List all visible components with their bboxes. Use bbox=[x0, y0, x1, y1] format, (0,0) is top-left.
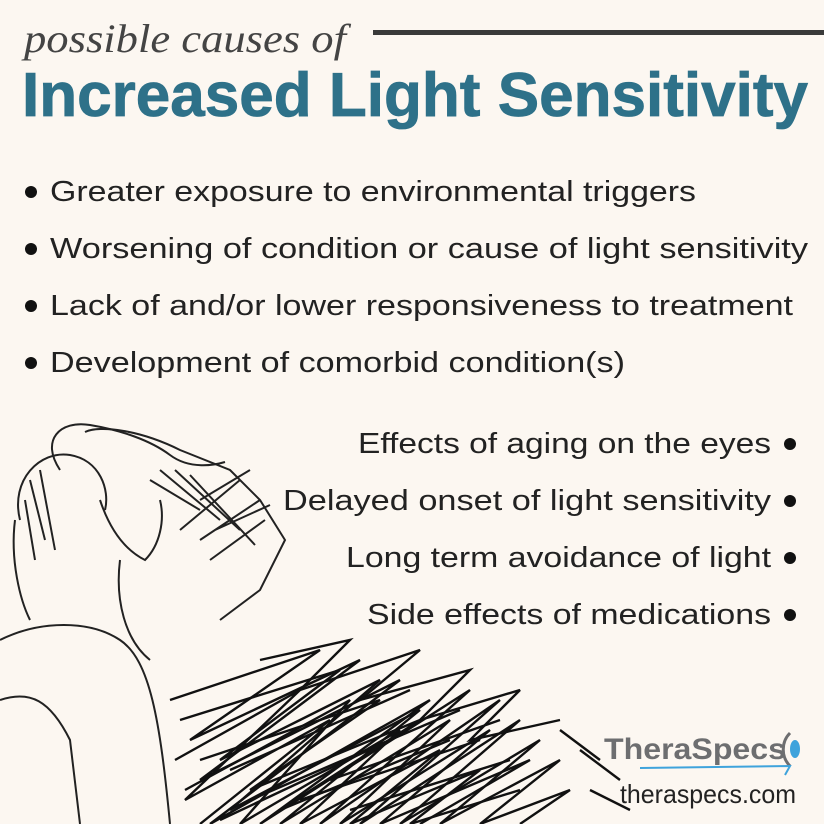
illustration: woman sketch bbox=[0, 424, 285, 824]
right bullet list: Delayed onset of light sensitivity bbox=[283, 485, 772, 517]
logo: TheraSpecs: TheraSpecs bbox=[604, 733, 786, 766]
title: Increased Light Sensitivity bbox=[22, 61, 809, 130]
left bullet list: Greater exposure to environmental triggers bbox=[50, 176, 696, 208]
left bullet list bbox=[25, 176, 809, 379]
logo: TheraSpecs bbox=[604, 733, 800, 775]
left bullet list: Development of comorbid condition(s) bbox=[50, 347, 625, 379]
right bullet list: Side effects of medications bbox=[367, 599, 771, 631]
left bullet list: Lack of and/or lower responsiveness to treatment bbox=[50, 290, 793, 322]
left bullet list: Worsening of condition or cause of light sensitivity bbox=[50, 233, 809, 265]
right bullet list: Long term avoidance of light bbox=[346, 542, 771, 574]
website url: theraspecs.com bbox=[620, 779, 796, 809]
illustration: scribble bbox=[170, 640, 630, 824]
subtitle script: possible causes of bbox=[21, 16, 351, 61]
right bullet list: Effects of aging on the eyes bbox=[358, 428, 771, 460]
right bullet list bbox=[283, 428, 796, 631]
header rule bbox=[373, 30, 824, 35]
